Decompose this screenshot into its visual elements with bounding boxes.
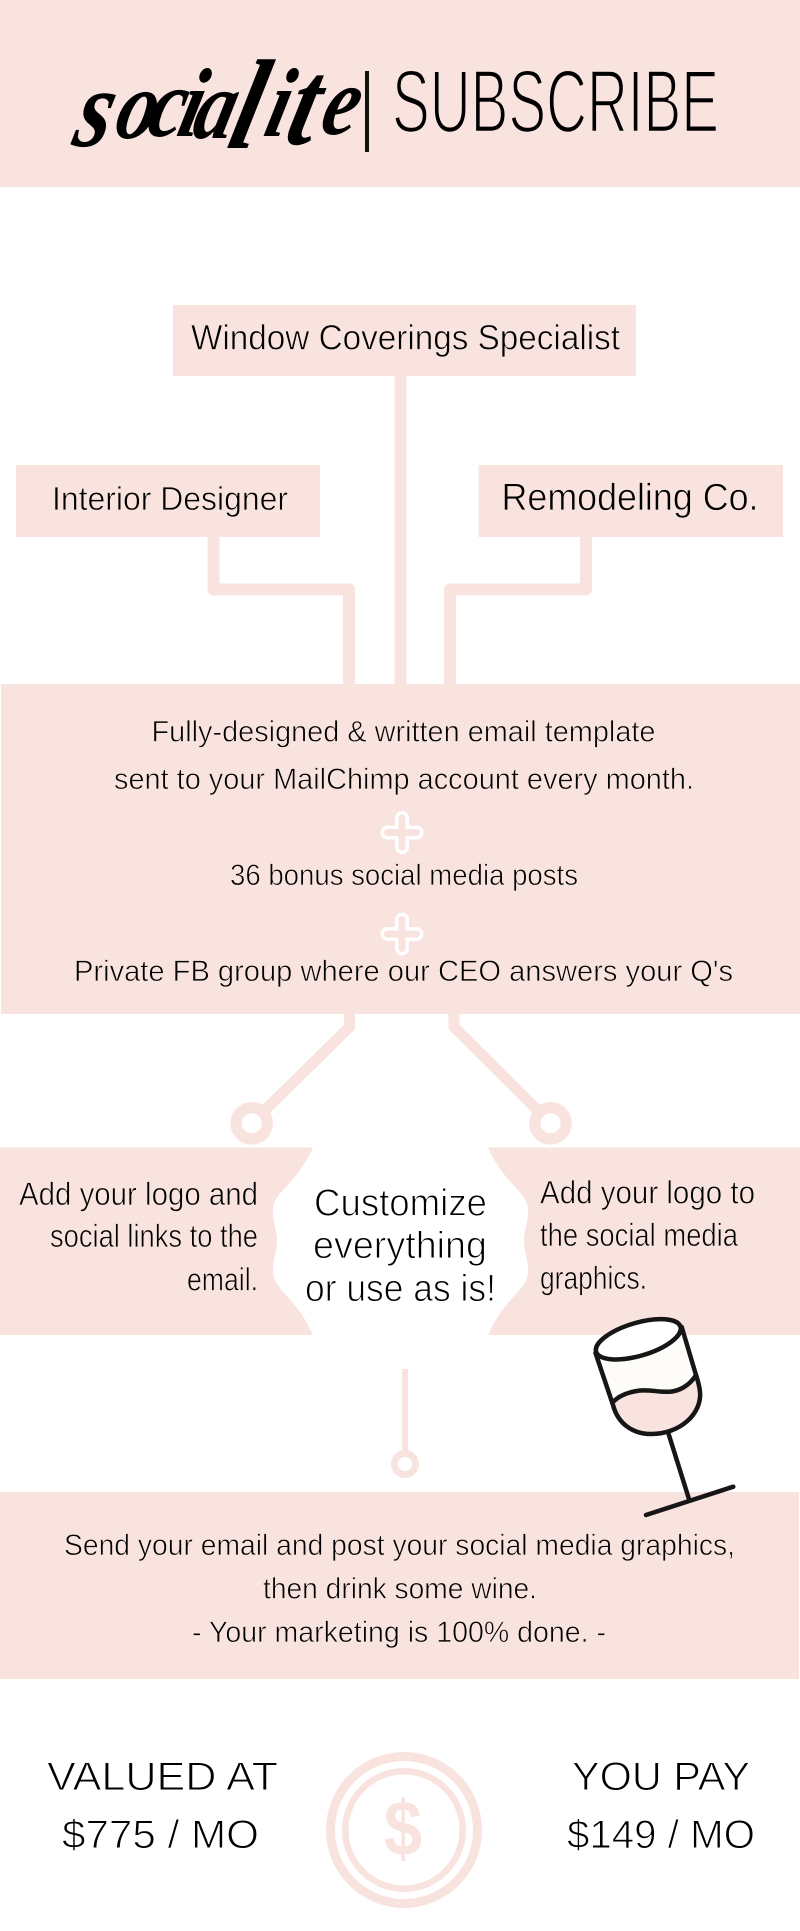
logo: socialite script: c bbox=[139, 49, 202, 157]
logo: socialite script: i bbox=[256, 49, 305, 157]
text: you pay price: YOU PAY bbox=[572, 1755, 750, 1799]
icon: wine glass bbox=[591, 1311, 733, 1515]
icon: dollar coin: $ bbox=[384, 1784, 422, 1872]
text: MailChimp account: sent to your MailChimp account every month. bbox=[114, 763, 694, 796]
callout: Customize everything: Customize bbox=[314, 1182, 487, 1224]
icon: dollar coin bbox=[330, 1756, 478, 1904]
callout: Customize everything: or use as is! bbox=[305, 1268, 496, 1310]
logo: socialite script: a bbox=[184, 51, 251, 159]
panel: add logo to email: social links to the bbox=[50, 1218, 258, 1254]
text: bonus posts: 36 bonus social media posts bbox=[230, 859, 578, 892]
connector: left branch with ring bbox=[236, 1010, 350, 1139]
panel: add logo to graphics: graphics. bbox=[540, 1260, 647, 1296]
logo: socialite script: i bbox=[169, 49, 219, 157]
logo: socialite script: t bbox=[276, 36, 340, 171]
box: Remodeling Co. bbox=[478, 465, 783, 537]
logo: socialite script: l bbox=[218, 34, 282, 176]
logo: socialite script: e bbox=[312, 47, 375, 155]
box: Window Coverings Specialist bbox=[173, 305, 636, 376]
panel: send and drink wine: - Your marketing is 100% done. - bbox=[192, 1616, 606, 1649]
panel: send and drink wine: Send your email and post your social media graphics, bbox=[64, 1529, 735, 1562]
icon: plus bbox=[388, 818, 416, 847]
text: valued at price: $775 / MO bbox=[62, 1813, 259, 1857]
panel: add logo to graphics: the social media bbox=[540, 1217, 738, 1253]
box: Interior Designer bbox=[16, 465, 320, 537]
callout: Customize everything bbox=[305, 1182, 496, 1310]
box: Window Coverings Specialist: Window Coverings Specialist bbox=[191, 318, 620, 358]
connector: right branch with ring bbox=[454, 1010, 566, 1139]
panel: add logo to graphics bbox=[488, 1148, 800, 1335]
panel: add logo to email bbox=[0, 1148, 313, 1335]
box: Remodeling Co.: Remodeling Co. bbox=[502, 477, 758, 519]
icon: plus bbox=[388, 920, 416, 948]
box: Interior Designer: Interior Designer bbox=[52, 480, 288, 517]
connector: stem with ring to final panel bbox=[394, 1369, 416, 1474]
text: private FB group: Private FB group where our CEO answers your Q's bbox=[74, 955, 733, 988]
panel: add logo to email: email. bbox=[187, 1262, 258, 1298]
logo: socialite script: o bbox=[106, 51, 174, 159]
panel: send and drink wine bbox=[0, 1492, 799, 1679]
text: you pay price bbox=[567, 1755, 755, 1857]
panel: add logo to graphics: Add your logo to bbox=[540, 1174, 755, 1210]
panel: add logo to email: Add your logo and bbox=[19, 1176, 258, 1212]
text: valued at price: VALUED AT bbox=[47, 1755, 278, 1799]
logo: socialite script: s bbox=[63, 46, 131, 171]
callout: Customize everything: everything bbox=[313, 1225, 487, 1267]
text: you pay price: $149 / MO bbox=[567, 1813, 755, 1857]
panel: what you get bbox=[1, 684, 800, 1014]
connectors: three clients to main panel bbox=[214, 370, 586, 690]
header banner bbox=[0, 0, 800, 187]
panel: send and drink wine: then drink some wine. bbox=[263, 1572, 537, 1606]
text: email template: Fully-designed & written email template bbox=[152, 716, 656, 748]
text: valued at price bbox=[47, 1755, 278, 1857]
divider bar bbox=[365, 71, 369, 152]
